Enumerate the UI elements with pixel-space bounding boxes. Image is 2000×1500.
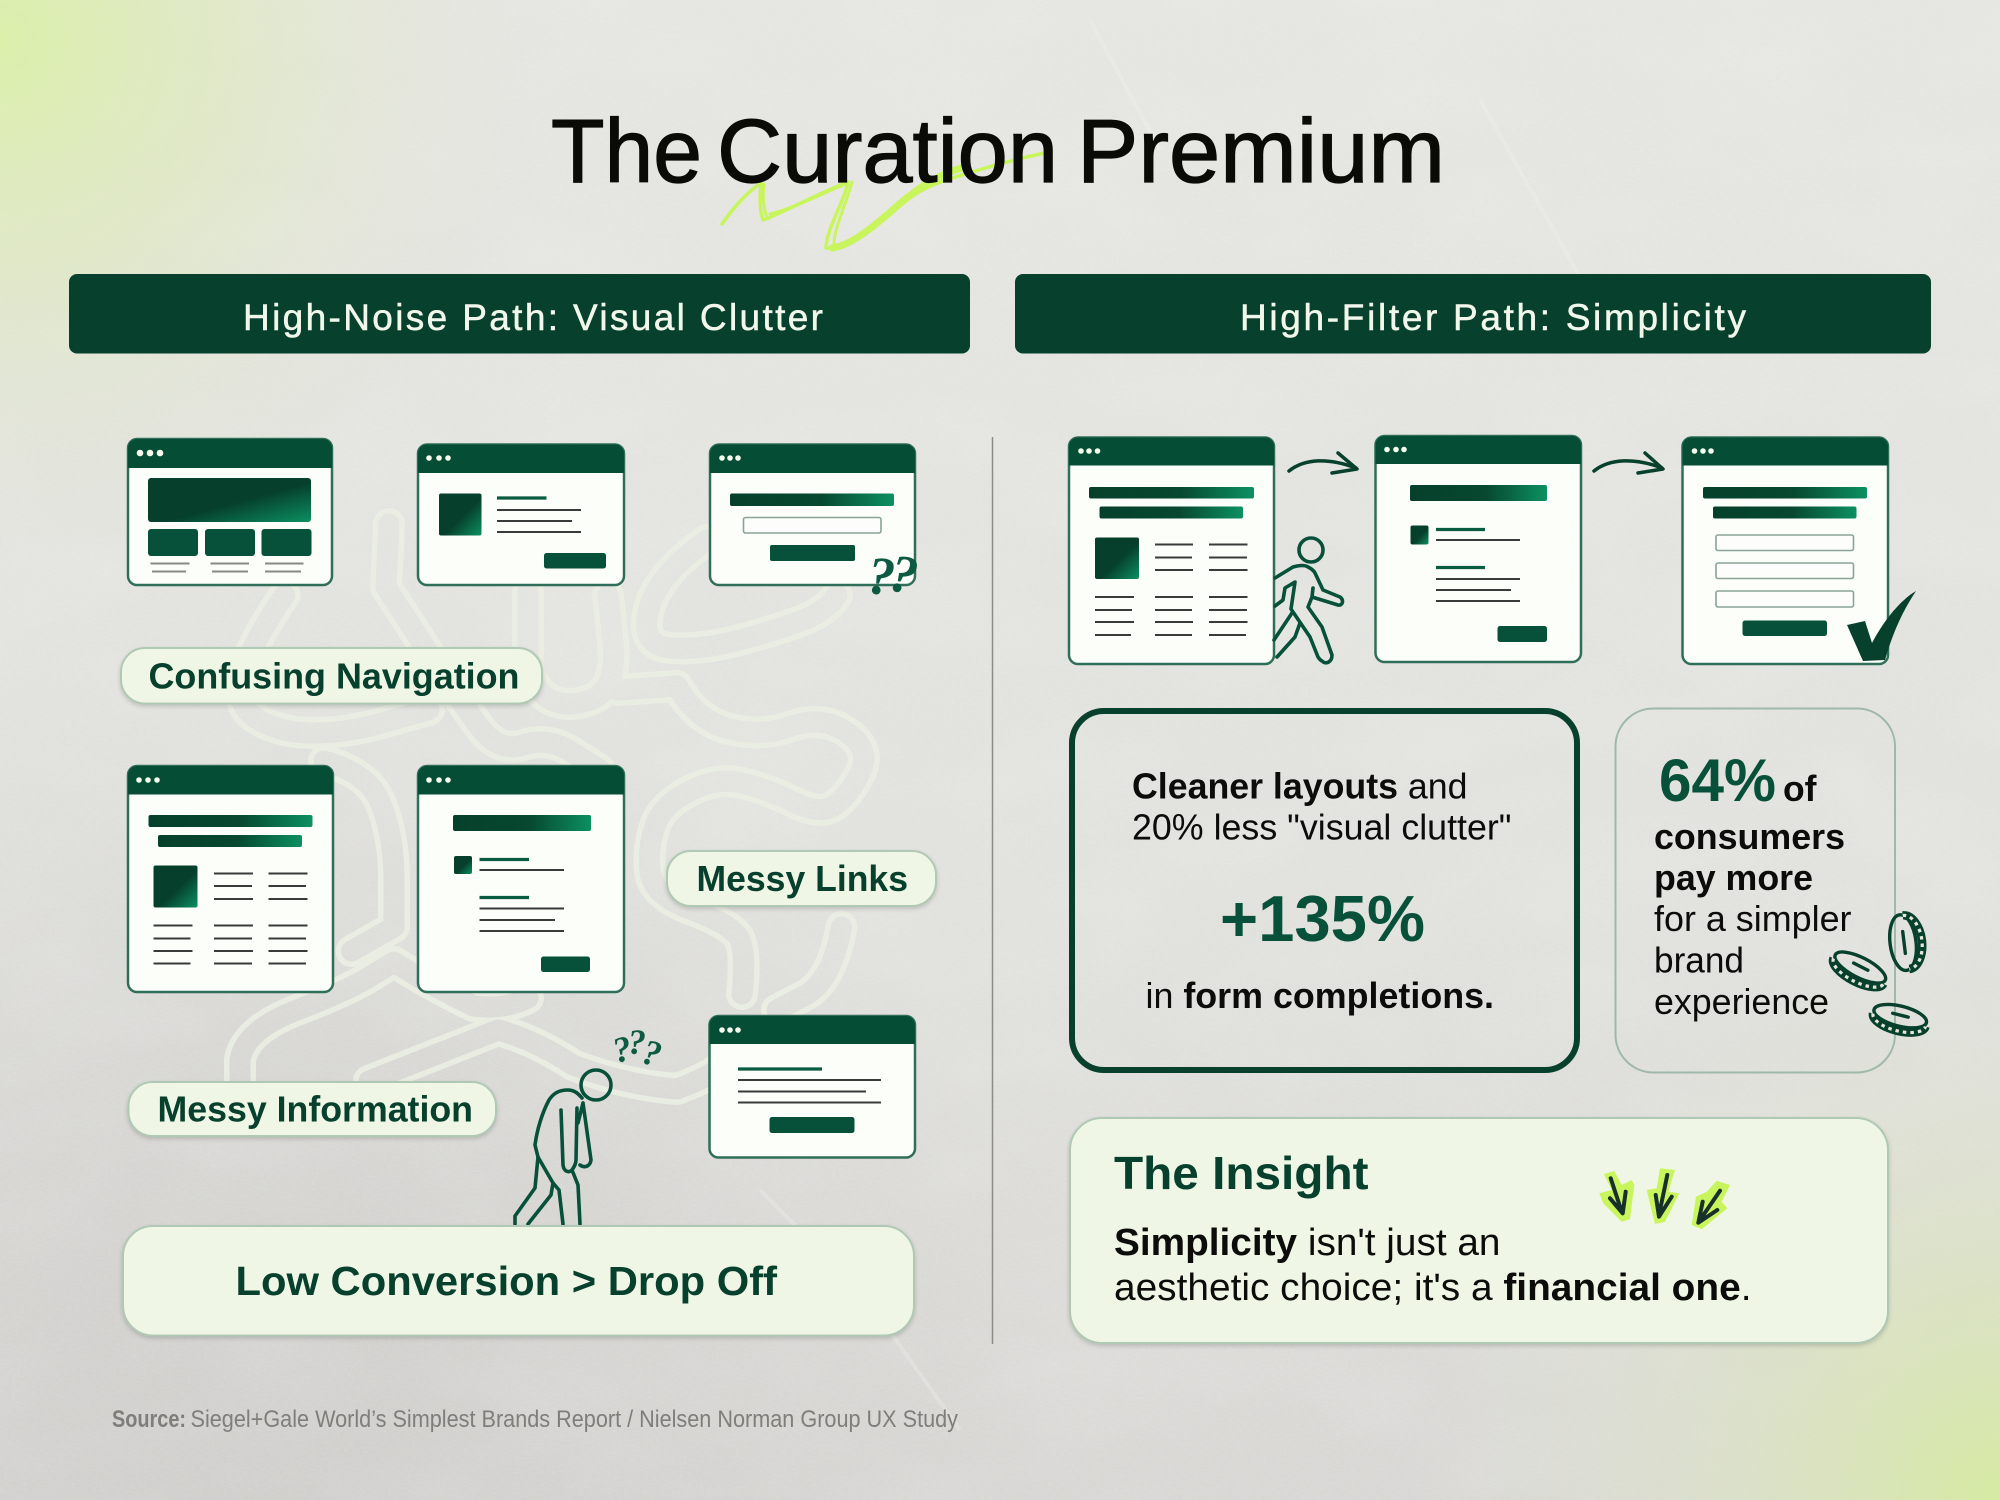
icon: check mark bbox=[1847, 591, 1916, 661]
callout: low conversion: Low Conversion > Drop Off bbox=[236, 1258, 777, 1304]
label: messy information: Messy Information bbox=[158, 1088, 473, 1130]
title: The bbox=[551, 102, 702, 202]
arrow: step one to two bbox=[1289, 453, 1357, 473]
icon: walking person bbox=[1274, 538, 1342, 663]
label: messy links: Messy Links bbox=[696, 858, 908, 899]
title: Premium bbox=[1077, 102, 1445, 202]
heading bar: high-noise path: High-Noise Path: Visual Clutter bbox=[243, 297, 823, 338]
panel: form completions stat: in form completions. bbox=[1146, 975, 1494, 1016]
scribble accent under title bbox=[722, 153, 1045, 248]
title: Curation bbox=[717, 102, 1058, 202]
panel: form completions stat: 20% less "visual clutter" bbox=[1132, 806, 1512, 848]
callout: low conversion bbox=[123, 1226, 914, 1336]
heading bar: high-filter path: High-Filter Path: Simplicity bbox=[1240, 297, 1746, 338]
panel: 64 percent stat bbox=[1616, 708, 1895, 1072]
icon: tired person with question marks: ? bbox=[638, 1031, 666, 1075]
panel: form completions stat bbox=[1072, 711, 1577, 1070]
window: text list page bbox=[418, 766, 624, 992]
window: dense page bbox=[128, 766, 333, 992]
heading bar: high-filter path bbox=[1015, 274, 1931, 354]
window: second simple step bbox=[1376, 436, 1581, 662]
window: first simple step bbox=[1069, 438, 1274, 664]
window: third simple step form bbox=[1682, 438, 1888, 664]
icon: tired person with question marks bbox=[515, 1022, 666, 1224]
label: confusing navigation: Confusing Navigation bbox=[148, 656, 520, 696]
panel: the insight: The Insight bbox=[1114, 1147, 1368, 1199]
icon: question marks: ? bbox=[866, 545, 897, 607]
panel: 64 percent stat: brand bbox=[1654, 940, 1744, 980]
icon: tired person with question marks: ? bbox=[609, 1028, 636, 1071]
background maze tangle bbox=[224, 508, 880, 1105]
window: thumbnail and text bbox=[418, 444, 624, 585]
panel: the insight: aesthetic choice; it's a financial one. bbox=[1114, 1267, 1752, 1309]
panel: the insight: Simplicity isn't just an bbox=[1114, 1222, 1500, 1264]
panel: 64 percent stat: pay more bbox=[1654, 857, 1813, 898]
icon: question marks: ? bbox=[885, 542, 922, 606]
arrow: step two to three bbox=[1594, 453, 1663, 473]
panel: 64 percent stat: of bbox=[1783, 768, 1817, 809]
panel: 64 percent stat: consumers bbox=[1654, 816, 1845, 857]
center divider bbox=[992, 437, 994, 1344]
panel: 64 percent stat: 64% bbox=[1659, 747, 1776, 814]
icon: falling coins bbox=[1829, 913, 1929, 1037]
label: messy information bbox=[128, 1082, 496, 1136]
icon: highlighted down arrows bbox=[1599, 1168, 1730, 1229]
heading bar: high-noise path bbox=[69, 274, 970, 354]
panel: the insight bbox=[1070, 1118, 1888, 1343]
panel: 64 percent stat: experience bbox=[1654, 981, 1829, 1022]
icon: question marks bbox=[866, 542, 922, 607]
panel: form completions stat: +135% bbox=[1220, 882, 1425, 955]
window: form with confusion marks bbox=[710, 444, 922, 607]
source note: Source: bbox=[112, 1406, 186, 1433]
window: short text and button bbox=[710, 1016, 915, 1158]
icon: tired person with question marks: ? bbox=[628, 1022, 646, 1062]
label: messy links bbox=[667, 851, 936, 906]
panel: 64 percent stat: for a simpler bbox=[1654, 898, 1852, 939]
panel: form completions stat: Cleaner layouts and bbox=[1132, 766, 1468, 806]
label: confusing navigation bbox=[121, 648, 542, 704]
source note: Siegel+Gale World’s Simplest Brands Report / Nielsen Norman Group UX Study bbox=[190, 1406, 958, 1433]
window: hero layout bbox=[128, 439, 332, 585]
